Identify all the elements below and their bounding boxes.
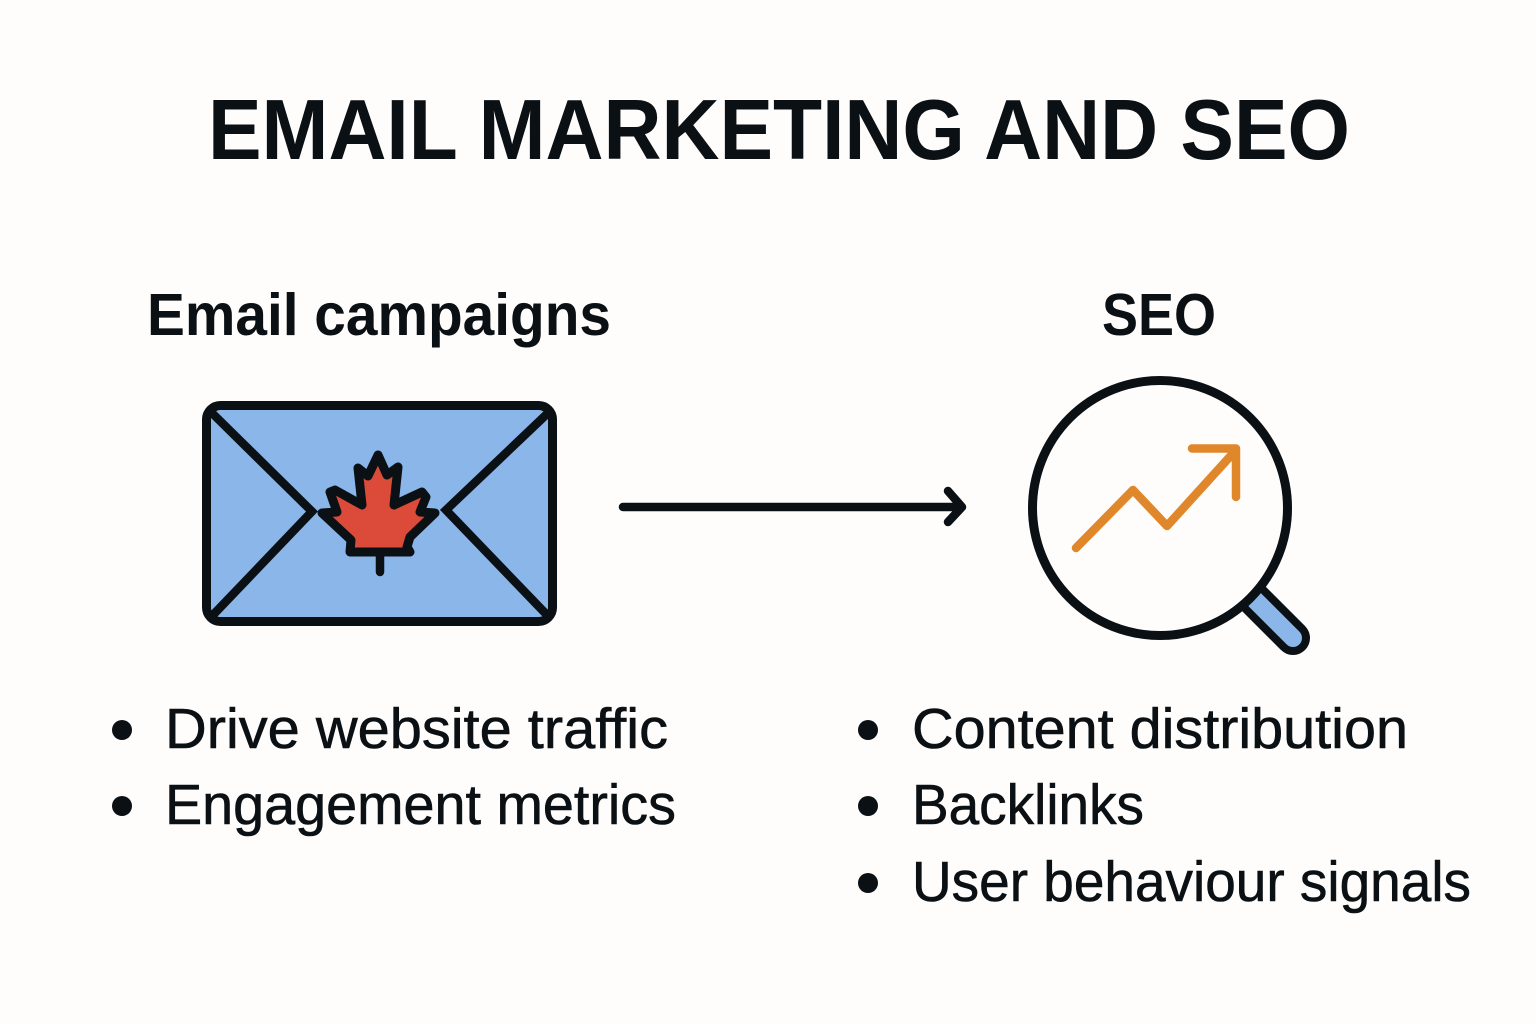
list: SEO factors: Content distribution [912, 697, 1408, 761]
icon: envelope with maple leaf [206, 406, 552, 622]
list: SEO factors: Backlinks [912, 773, 1144, 837]
list: email benefits [112, 697, 676, 837]
icon: magnifying glass with growth arrow [1032, 380, 1293, 638]
arrow: email to SEO [623, 491, 962, 522]
list: email benefits: Engagement metrics [165, 773, 676, 837]
heading: email campaigns: Email campaigns [147, 282, 611, 348]
list: email benefits: Drive website traffic [165, 697, 668, 761]
heading: SEO: SEO [1102, 282, 1216, 348]
list: SEO factors: User behaviour signals [912, 850, 1471, 914]
list: SEO factors [858, 697, 1471, 914]
title: EMAIL MARKETING AND SEO [208, 83, 1350, 178]
